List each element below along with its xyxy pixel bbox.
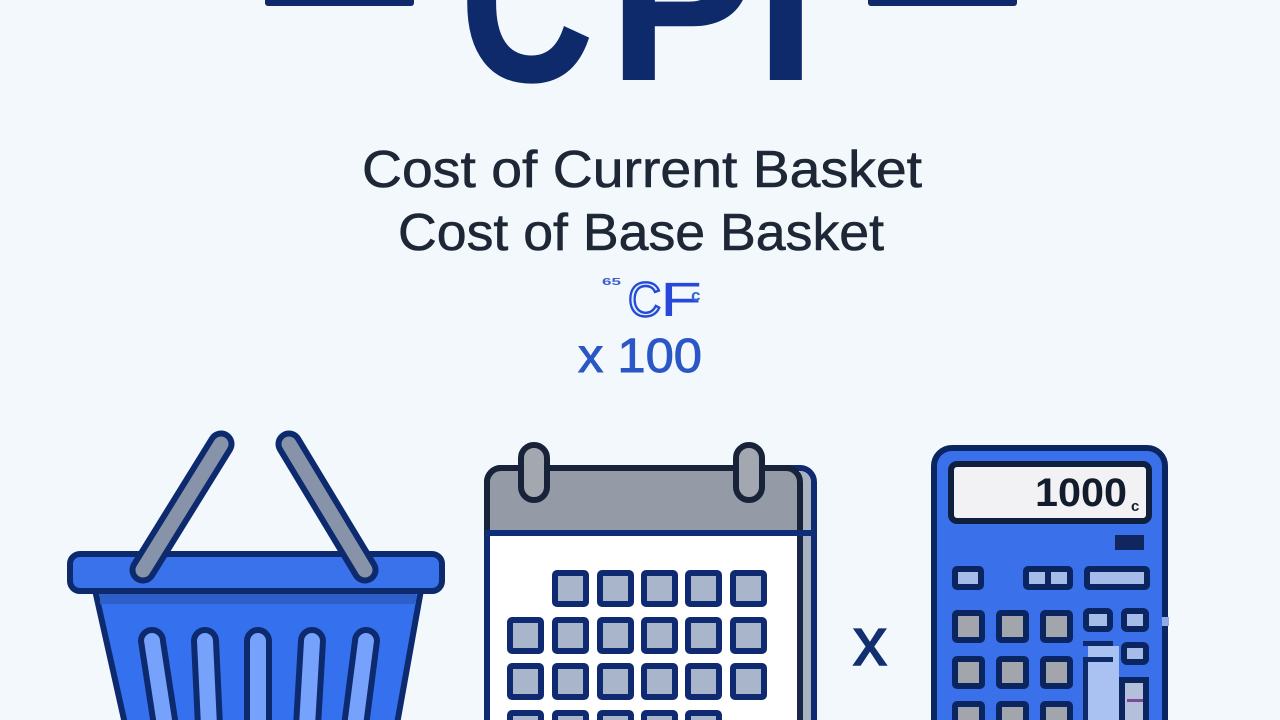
icon: calendar (485, 445, 815, 720)
calculator side notch (1162, 617, 1169, 626)
icon: shopping basket (70, 444, 442, 720)
calendar date cells (510, 573, 764, 720)
garbled small CF mark: F (660, 274, 702, 327)
formula text block: Cost of Base Basket (398, 204, 885, 262)
formula text block: Cost of Current Basket (362, 141, 923, 199)
calculator display: 1000 (1035, 471, 1127, 515)
icon: calculator (934, 448, 1169, 720)
calendar header (487, 468, 800, 533)
multiplication sign: x (853, 604, 887, 680)
basket slots (141, 630, 377, 720)
calculator display (951, 464, 1149, 521)
basket rim (70, 554, 442, 591)
calculator number keys (955, 613, 1070, 720)
multiplier: x 100: x 100 (578, 330, 702, 383)
basket body (95, 590, 421, 720)
calculator display: c (1131, 498, 1139, 515)
basket shadow under rim (100, 594, 416, 604)
garbled small CF mark: C (628, 274, 661, 327)
calendar page (487, 468, 814, 720)
calculator body (934, 448, 1165, 720)
garbled small CF mark: 65 (602, 277, 622, 288)
calculator function keys (1086, 611, 1146, 662)
garbled small CF mark (602, 274, 702, 327)
calendar side strip (800, 471, 811, 720)
calculator tall light key (1083, 641, 1119, 720)
basket handles (143, 444, 365, 570)
calendar rings (521, 445, 762, 500)
garbled small CF mark: c (691, 286, 700, 305)
calculator equals key (1122, 680, 1146, 720)
title: CPI with flanking rules (265, 0, 1017, 128)
calculator indicator (1115, 535, 1144, 550)
formula text block (362, 141, 923, 262)
calculator top row keys (955, 569, 1147, 587)
